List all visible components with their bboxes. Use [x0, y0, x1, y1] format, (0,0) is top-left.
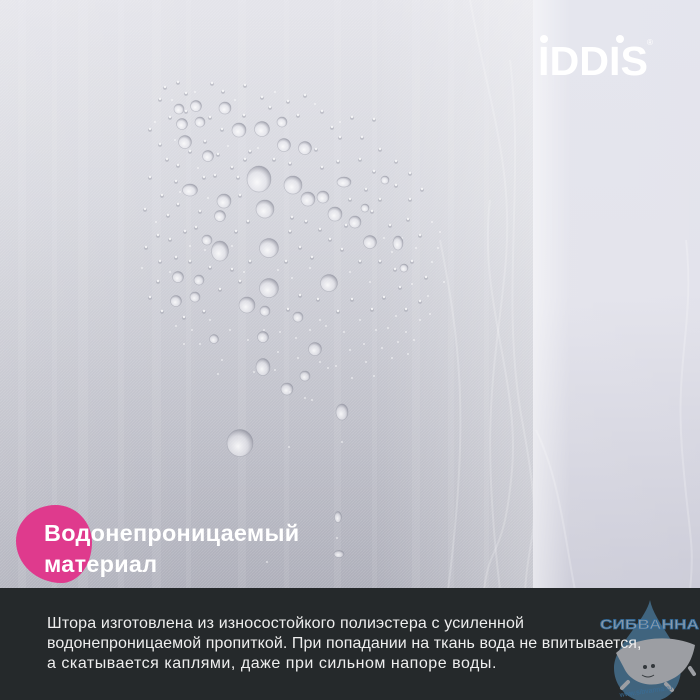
description text: а скатывается каплями, даже при сильном напоре воды. — [47, 655, 497, 672]
heading: Водонепроницаемый — [44, 520, 300, 546]
watermark: Sibvanna logo — [600, 600, 700, 700]
watermark face — [642, 664, 655, 677]
watermark drop — [614, 600, 681, 700]
heading — [44, 520, 300, 577]
logo: iddis: IDDIS — [538, 38, 648, 84]
description text: водонепроницаемой пропиткой. При попадании на ткань вода не впитывается, — [47, 635, 642, 652]
description text — [47, 615, 642, 672]
water drops — [142, 82, 444, 562]
heading: материал — [44, 551, 157, 577]
description text: Штора изготовлена из износостойкого полиэстера с усиленной — [47, 615, 524, 632]
heading blob — [16, 505, 92, 583]
watermark url: www.sibvanna.ru — [618, 685, 673, 699]
curtain fold — [533, 0, 700, 590]
watermark bathtub — [616, 638, 695, 690]
dark description panel — [0, 588, 700, 700]
watermark name: СИБВАННА — [600, 616, 699, 632]
fabric background — [0, 0, 534, 590]
logo: iddis: ® — [647, 38, 653, 47]
